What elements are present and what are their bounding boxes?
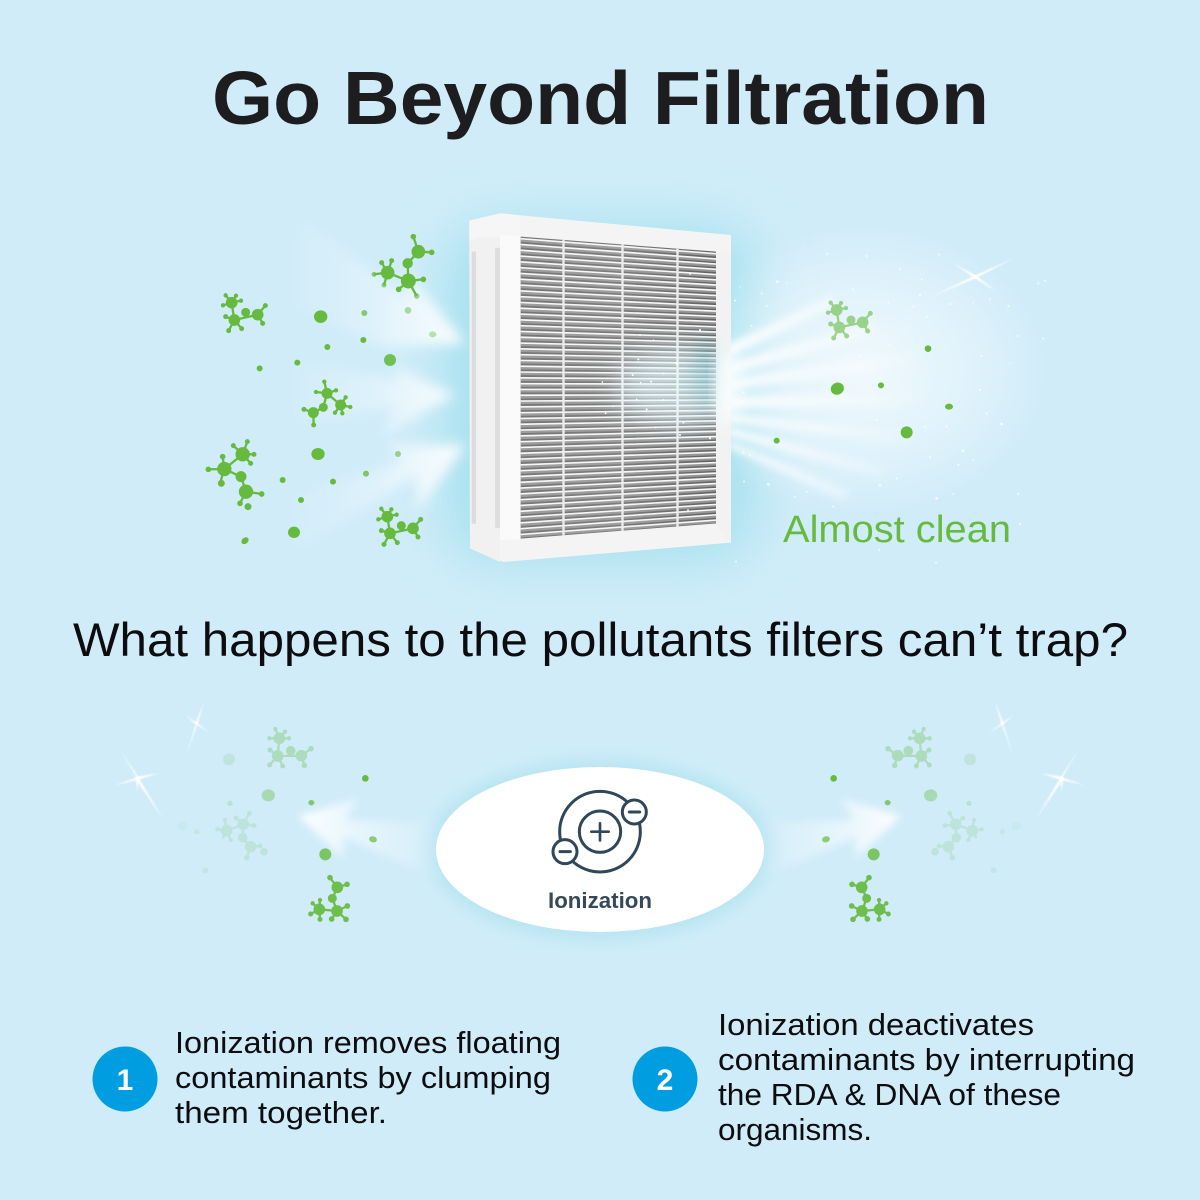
step 2 text: contaminants by interrupting [718,1042,1135,1077]
step 2 badge [632,1046,698,1112]
molecule 5 [377,508,422,546]
faded molecule top [268,728,313,767]
particles [178,753,378,873]
sparkle large [115,749,163,818]
ionization label: Ionization [548,888,652,913]
filter product [469,213,743,562]
ionization effect: right side (mirrored) [759,702,1084,921]
grille mullions [562,240,679,535]
faded molecule [827,302,872,339]
oval badge [436,767,764,932]
step 2 text: Ionization deactivates [718,1007,1034,1042]
ionization oval [436,767,764,932]
air glow through filter [617,347,743,427]
step 1 [92,1025,561,1130]
step 2 text: organisms. [718,1112,872,1147]
pollutants: almost clean side [774,302,953,444]
step 1 badge [92,1046,158,1112]
molecule 2 [373,235,433,298]
soft clean air cloud [677,223,1050,517]
bright molecule [309,876,349,921]
title: Go Beyond Filtration [212,56,989,140]
glow behind ionization oval [428,760,772,940]
sparkle small [185,702,210,753]
molecule 3 [303,381,351,426]
icon: ion atom [553,791,646,872]
step 1 text: them together. [175,1095,387,1130]
air arrow left [298,798,440,880]
ionization effect: left side [115,702,440,921]
white specks on filter [601,273,711,511]
label: almost clean: Almost clean [783,509,1011,551]
step 2 [632,1007,1135,1147]
step 1 number: 1 [117,1064,133,1097]
step 1 text [175,1025,561,1130]
filter grille [521,237,716,539]
step 2 text: the RDA & DNA of these [718,1077,1061,1112]
sparkle: clean air [930,258,1013,297]
step 2 number: 2 [657,1064,673,1097]
step 1 text: contaminants by clumping [175,1060,551,1095]
incoming air arrows [277,217,465,557]
white specks: clean air [734,253,1046,564]
step 2 text [718,1007,1135,1147]
glow behind filter [445,225,755,560]
molecule 1 [222,294,267,332]
molecule 4 [207,440,263,509]
particles [240,307,436,546]
pollutants: incoming [207,235,436,546]
filter frame [469,213,731,562]
faded molecule middle [216,812,267,859]
light rays [727,295,933,500]
question heading: What happens to the pollutants filters can’t trap? [73,613,1128,666]
outgoing clean air rays [677,223,1050,517]
step 1 text: Ionization removes floating [175,1025,561,1060]
remaining particles [774,345,953,444]
